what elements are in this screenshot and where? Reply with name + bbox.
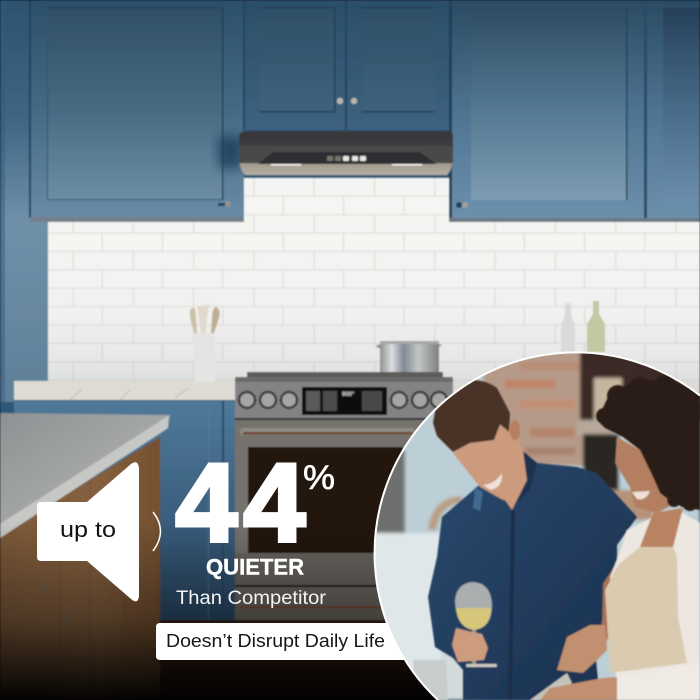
callout pill bbox=[156, 623, 405, 660]
sound wave arc bbox=[153, 512, 160, 551]
woman: shirt bbox=[608, 512, 700, 678]
man: shirt bbox=[428, 447, 637, 700]
speaker icon with "up to" bbox=[37, 462, 139, 601]
oven window bbox=[248, 447, 403, 553]
kitchen island bbox=[0, 413, 170, 700]
small glass foreground bbox=[413, 660, 448, 700]
upper center cabinet bbox=[243, 0, 450, 130]
woman: smile bbox=[632, 491, 650, 499]
knobs bbox=[239, 392, 447, 408]
hood shadow bbox=[218, 136, 242, 168]
woman: apron bbox=[605, 547, 687, 673]
upper right cabinet bbox=[449, 0, 700, 222]
heading: quieter: QUIETER bbox=[206, 554, 304, 580]
range bbox=[160, 372, 453, 700]
wine glass bbox=[455, 582, 497, 667]
headline number: 44 bbox=[176, 441, 306, 565]
man: ear bbox=[510, 420, 520, 440]
woman: forearm bbox=[540, 677, 617, 700]
speaker icon with "up to": up to bbox=[60, 517, 116, 542]
bottles bbox=[561, 301, 605, 352]
inset background bbox=[370, 350, 700, 700]
man: collar and placket bbox=[473, 487, 483, 511]
callout pill: Doesn’t Disrupt Daily Life bbox=[166, 630, 385, 651]
percent sign: % bbox=[303, 459, 335, 497]
bottom dark gradient bbox=[0, 520, 440, 700]
subheading: than competitor: Than Competitor bbox=[176, 588, 327, 609]
woman: curly hair bbox=[596, 375, 700, 511]
control display: 900° bbox=[342, 392, 355, 398]
inset circle border bbox=[375, 352, 700, 700]
man: hair bbox=[433, 380, 510, 452]
counter left bbox=[14, 381, 236, 402]
photo inset: couple cooking bbox=[370, 350, 700, 700]
woman: hand bbox=[557, 625, 607, 673]
lower cabinet bbox=[14, 401, 236, 623]
tiled wall bbox=[48, 178, 700, 403]
range hood bbox=[239, 131, 453, 175]
control display bbox=[302, 387, 387, 415]
woman: sleeve bbox=[617, 663, 700, 700]
woman: face bbox=[615, 437, 672, 513]
counter right bbox=[453, 381, 700, 401]
upper left cabinet bbox=[29, 0, 244, 222]
man: smile bbox=[483, 473, 502, 490]
pot bbox=[375, 341, 442, 378]
left wall column bbox=[0, 0, 48, 402]
utensil jar bbox=[190, 305, 220, 382]
knife bbox=[530, 673, 572, 700]
woman: neck bbox=[640, 508, 683, 547]
man: neck and face bbox=[453, 425, 527, 510]
man: hand bbox=[452, 628, 488, 662]
